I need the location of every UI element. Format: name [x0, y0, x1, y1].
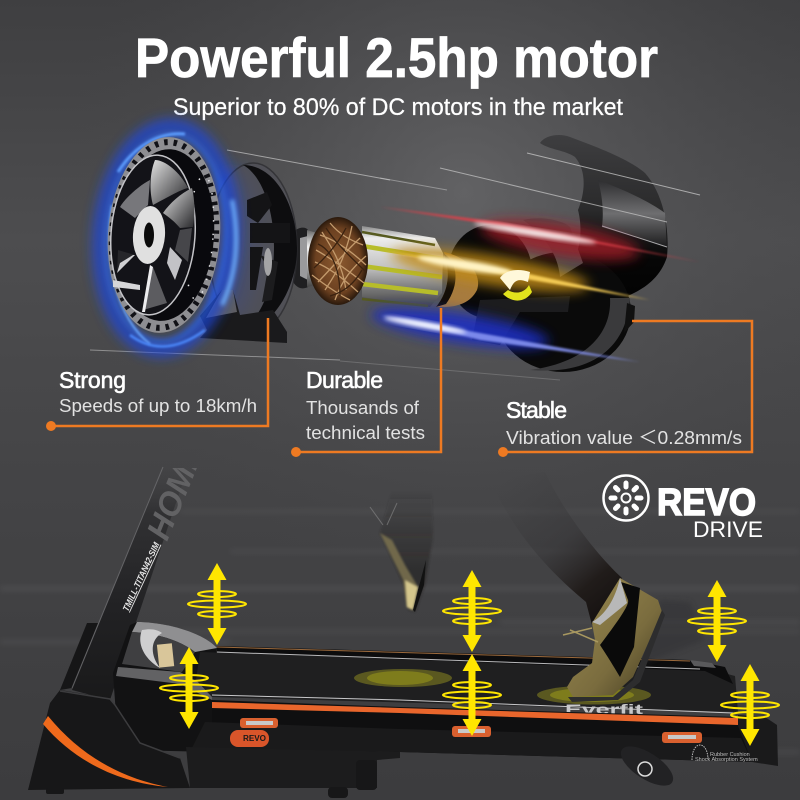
deck side panel [200, 700, 752, 762]
text: Durable line two: technical tests [306, 422, 425, 443]
fan blades [113, 160, 194, 312]
deck lower frame [192, 722, 752, 762]
speed lines [90, 150, 560, 380]
logo: Revo Drive [604, 476, 763, 542]
shock arrow 6 [721, 664, 779, 746]
blue glow behind pulley [208, 170, 256, 320]
fan face [106, 152, 200, 318]
left foot housing [28, 690, 190, 790]
rear curved cover [530, 135, 668, 302]
leader dot: Strong [46, 421, 56, 431]
top side rail [217, 646, 733, 684]
callout: Stable [498, 321, 752, 457]
motor cover [113, 622, 217, 752]
orange base stripe [43, 716, 168, 787]
text: Strong detail: Speeds of up to 18km/h [59, 395, 257, 416]
shaft bearing [293, 228, 308, 288]
yellow footprint: shoe [537, 686, 651, 704]
upright post [72, 467, 187, 700]
black pulley wheel [209, 163, 297, 333]
mounting bracket [200, 290, 287, 343]
orange stripe [212, 702, 738, 725]
shock arrow 5 [688, 580, 746, 662]
rear housing disc [495, 252, 635, 372]
black end housing [448, 225, 532, 319]
icon: wheel [604, 476, 648, 520]
leader line: Strong [51, 318, 268, 426]
post lettering: HOME: HOME [139, 439, 211, 545]
console box [60, 623, 98, 690]
speed lines over cover [440, 153, 700, 222]
heading: Stable: Stable [506, 397, 567, 423]
callout: Strong [46, 318, 268, 431]
shock system label: Rubber Cushion [710, 752, 750, 758]
callout: Durable [291, 308, 441, 457]
post model label: TMILL-TITAN42-SIM [121, 540, 162, 613]
trailing leg [490, 472, 622, 625]
side bumpers [240, 718, 702, 743]
subtitle: Superior to 80% of DC motors in the market [173, 94, 623, 121]
running belt [196, 652, 738, 712]
leader line: Durable [296, 308, 441, 452]
leader dot: Durable [291, 447, 301, 457]
text: Stable detail: Vibration value ＜0.28mm/s [506, 427, 742, 448]
copper windings [308, 217, 368, 305]
blue light streak [369, 299, 640, 362]
leader line: Stable [503, 321, 752, 452]
shock arrow 1 [188, 563, 246, 645]
heading: Strong: Strong [59, 367, 126, 393]
heading: Durable: Durable [306, 367, 383, 393]
treadmill [28, 439, 778, 798]
shock system label: Shock Absorption System [695, 757, 758, 763]
yellow footprint: heel [354, 669, 452, 687]
text: Durable line one: Thousands of [306, 397, 420, 418]
REVO badge [230, 730, 269, 747]
shock arrow 4 [443, 654, 501, 736]
red light streak [380, 207, 700, 268]
rear feet [46, 760, 377, 798]
rear shoe motion blur [640, 600, 705, 665]
runner [370, 472, 705, 702]
REVO badge: REVO [243, 734, 266, 743]
translucent side panel [523, 218, 583, 277]
shock arrow 3 [443, 570, 501, 652]
leader dot: Stable [498, 447, 508, 457]
wordmark: REVO: REVO [657, 482, 756, 524]
end cap [738, 715, 778, 766]
motor exploded view [90, 122, 700, 380]
running shoe [563, 578, 665, 702]
title: Powerful 2.5hp motor [135, 26, 658, 89]
armature [362, 226, 443, 307]
base beam [186, 747, 400, 788]
shock system label [692, 745, 758, 763]
wordmark: DRIVE: DRIVE [693, 517, 763, 542]
Everfit brand: Everfit [565, 701, 644, 717]
shock arrow 2 [160, 647, 218, 729]
blue glow ring [92, 122, 240, 354]
fan hub [131, 205, 167, 265]
fan disc [101, 133, 227, 337]
gold light streak [380, 240, 650, 301]
control pod [615, 739, 679, 793]
front hanging shoe [370, 490, 433, 612]
commutator [436, 252, 478, 307]
